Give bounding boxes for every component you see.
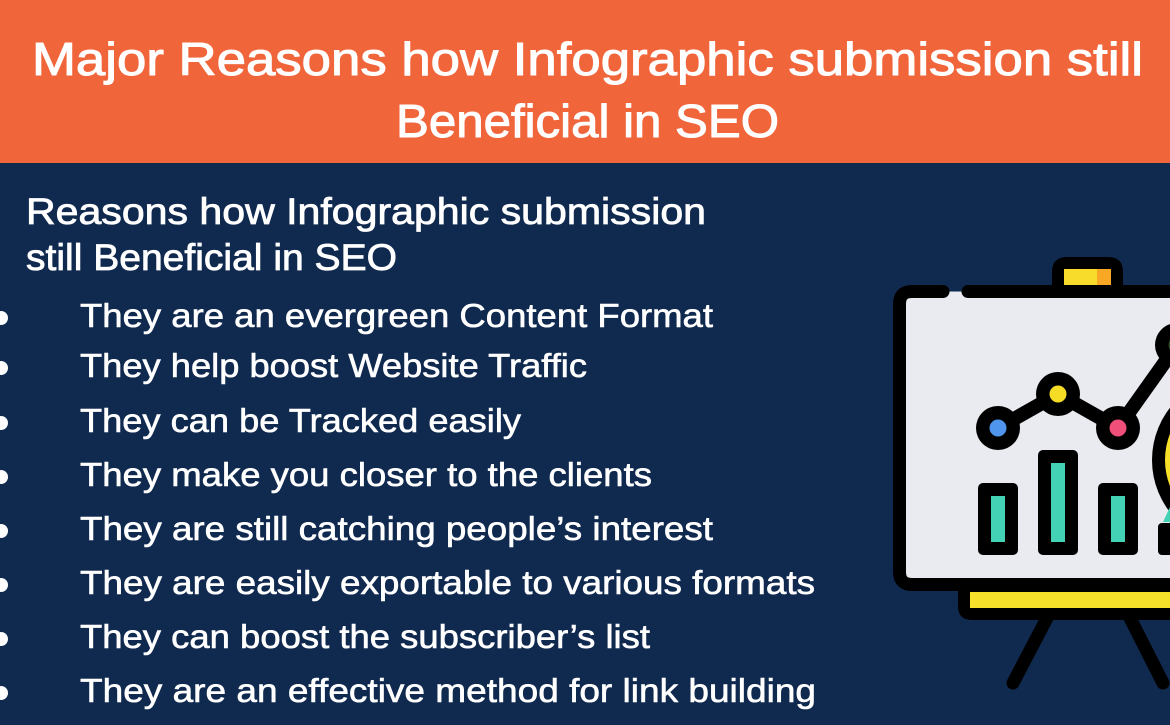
list item 2: They help boost Website Traffic <box>80 347 587 384</box>
board surface <box>900 292 1170 584</box>
list item 3: They can be Tracked easily <box>80 402 522 439</box>
title: Major Reasons how Infographic submission still <box>32 33 1143 85</box>
icon: presentation board with charts <box>900 257 1170 683</box>
easel legs <box>1013 618 1163 683</box>
list item 7: They can boost the subscriber’s list <box>80 618 650 655</box>
title <box>32 33 1143 147</box>
header banner <box>0 0 1170 163</box>
bar chart <box>978 450 1170 555</box>
subheading <box>26 191 706 278</box>
list item 1: They are an evergreen Content Format <box>80 297 713 334</box>
list item 6: They are easily exportable to various formats <box>80 564 815 601</box>
list item 4: They make you closer to the clients <box>80 456 652 493</box>
list item 5: They are still catching people’s interest <box>80 510 713 547</box>
subheading: Reasons how Infographic submission <box>26 191 706 232</box>
icon: light bulb <box>1152 375 1170 545</box>
panel: navy background <box>0 163 1170 725</box>
board tray <box>958 586 1170 620</box>
bullet list <box>0 297 816 709</box>
list item 8: They are an effective method for link building <box>80 672 816 709</box>
subheading: still Beneficial in SEO <box>26 237 397 278</box>
board clip <box>1052 257 1123 288</box>
title: Beneficial in SEO <box>396 95 779 147</box>
line chart <box>976 323 1170 450</box>
